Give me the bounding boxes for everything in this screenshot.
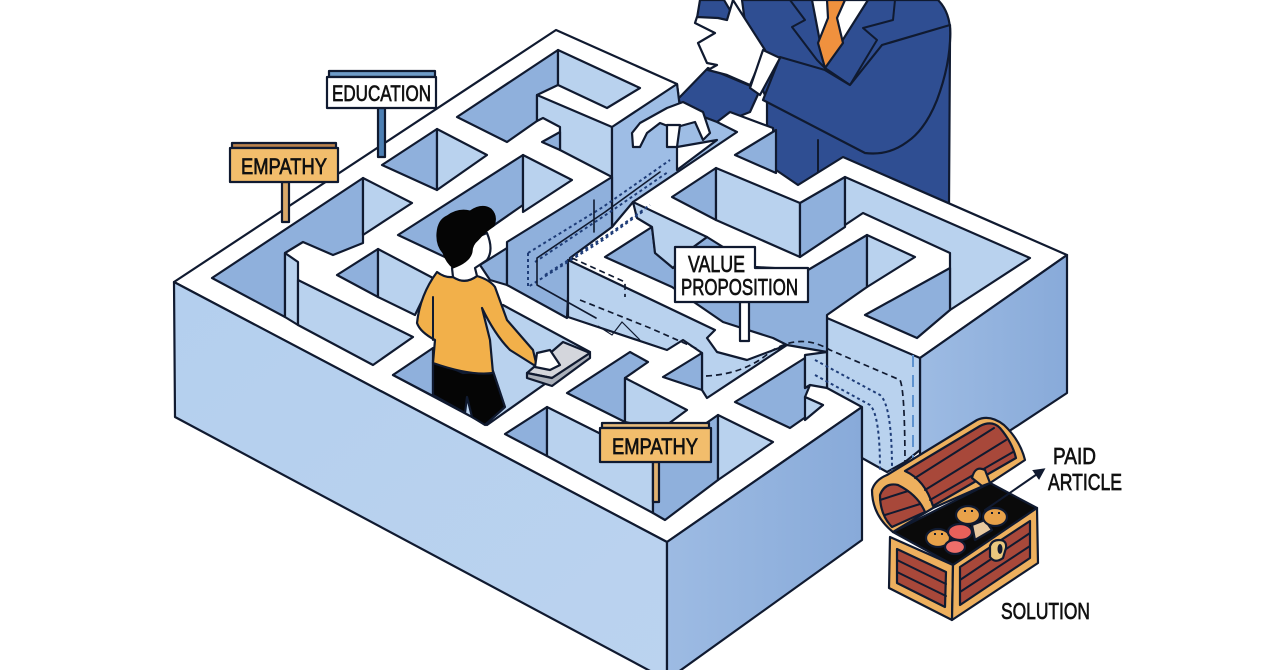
inner column face <box>827 318 920 472</box>
arrow to paid article <box>985 470 1043 510</box>
book <box>527 342 590 386</box>
pit: upper right <box>672 168 1030 338</box>
maze top surface <box>174 30 1067 542</box>
chest left face <box>889 537 953 620</box>
orange sweater <box>417 272 537 374</box>
suit torso <box>742 0 950 205</box>
face below bar <box>625 378 687 430</box>
pit: diamond <box>382 129 487 190</box>
sign: value proposition: PROPOSITION <box>681 274 798 300</box>
sign: empathy left <box>230 143 338 222</box>
lower hand with crumpled paper <box>632 102 717 170</box>
neck and face <box>452 233 490 281</box>
sign: education <box>327 71 436 157</box>
front left outer wall <box>174 282 667 670</box>
pit: left lower <box>298 280 413 365</box>
pit: top right notch <box>735 130 776 173</box>
forearm <box>763 25 950 154</box>
front right outer wall <box>667 407 862 670</box>
maze <box>174 30 1067 670</box>
shirt <box>812 0 868 68</box>
legs <box>433 360 505 425</box>
pit: beside person's shoulder <box>337 249 433 315</box>
upper hand <box>695 0 765 85</box>
lid <box>872 418 1025 532</box>
sign: value proposition <box>675 247 808 341</box>
pit: top chamber <box>457 50 640 142</box>
right outer wall <box>920 255 1067 490</box>
label: article: ARTICLE <box>1048 469 1122 495</box>
sign: empathy left: EMPATHY <box>241 154 327 179</box>
businessman <box>677 0 950 205</box>
chest right face <box>952 508 1038 620</box>
hand <box>535 350 560 370</box>
corridor with path <box>568 260 787 398</box>
dark wall behind path <box>507 177 612 318</box>
lock <box>990 540 1006 561</box>
label: solution: SOLUTION <box>1001 598 1090 624</box>
pit: long centre <box>398 155 572 285</box>
left arm <box>677 68 760 125</box>
pit: centre bottom <box>567 352 648 422</box>
orange tie <box>818 0 845 68</box>
pit: under value proposition <box>605 202 915 352</box>
tablet held up <box>697 0 737 22</box>
label: paid article: PAID <box>1053 443 1096 469</box>
interior <box>893 483 1037 565</box>
shirt cuff <box>750 50 780 95</box>
sign: empathy bottom <box>600 423 711 502</box>
pit: bottom large <box>505 407 773 520</box>
sign: value proposition: VALUE <box>688 251 745 277</box>
sign: education: EDUCATION <box>332 81 431 106</box>
block with corridor corner <box>537 84 737 227</box>
person <box>417 206 590 425</box>
treasure <box>926 506 1007 554</box>
dotted hidden path <box>528 160 913 470</box>
treasure chest <box>872 418 1043 620</box>
pit: under person <box>393 305 590 425</box>
hair <box>437 206 495 268</box>
leg divider <box>817 140 819 205</box>
lapels <box>790 0 895 85</box>
sign: empathy bottom: EMPATHY <box>612 434 698 459</box>
pit: lower right <box>735 352 827 428</box>
pit: small triangle <box>663 353 702 390</box>
pit: left big <box>212 178 412 325</box>
